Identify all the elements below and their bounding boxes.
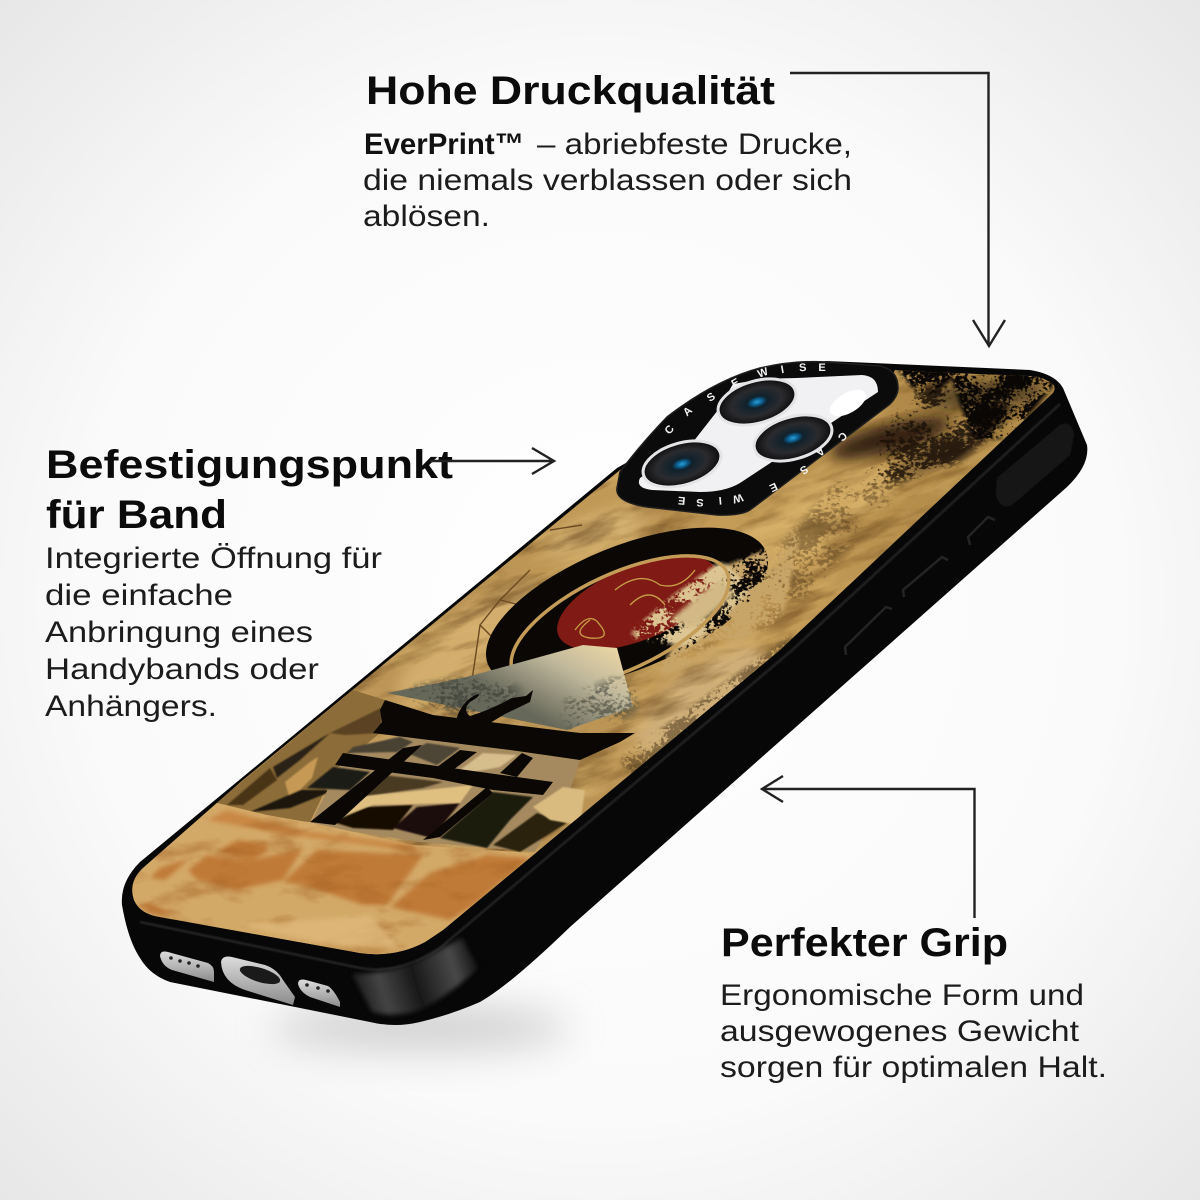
pale floor lighter patch (240, 915, 400, 950)
red sun (557, 558, 718, 648)
gold ring (509, 554, 731, 674)
lens: top (713, 371, 801, 433)
heading (46, 443, 453, 537)
CASEWISE lettering: E (818, 362, 826, 374)
scene background between beams (310, 735, 580, 852)
CASEWISE lettering: S (705, 391, 718, 405)
speckled dirt lower right (620, 634, 796, 773)
stone floor (132, 803, 538, 954)
clouds solid core (670, 580, 735, 628)
speaker holes right (305, 983, 330, 993)
marble texture (202, 370, 1042, 946)
swirl details (227, 707, 383, 812)
mottled crack lines (760, 472, 902, 602)
heading: Hohe Druckqualität (366, 69, 775, 113)
CASEWISE lettering (663, 362, 849, 508)
cream blob right (533, 787, 585, 825)
CASEWISE lettering: S (799, 362, 807, 374)
body text (45, 542, 382, 723)
body text (363, 128, 852, 233)
CASEWISE lettering: A (813, 444, 827, 458)
heading: Befestigungspunkt (46, 443, 453, 487)
mountain shading right (560, 675, 640, 735)
side wall rim (140, 404, 1060, 969)
body text: ausgewogenes Gewicht (720, 1015, 1080, 1048)
callout: Befestigungspunkt (45, 443, 453, 723)
body text: die einfache (45, 579, 233, 612)
lens: right (749, 407, 837, 469)
arrow: strap attachment (430, 448, 554, 474)
CASEWISE lettering: I (718, 494, 722, 506)
usb opening (221, 957, 295, 1005)
lens: left (638, 433, 726, 495)
CASEWISE lettering: E (678, 494, 686, 506)
CASEWISE lettering: S (696, 496, 704, 508)
body text: EverPrint™ (364, 128, 524, 161)
floor mottling (134, 816, 533, 954)
case body (122, 361, 1087, 1025)
flash (826, 384, 870, 422)
camera island (617, 362, 898, 515)
CASEWISE lettering: C (663, 423, 677, 437)
callout: Hohe Druckqualität (363, 69, 852, 233)
clouds over sun (628, 562, 750, 645)
side buttons (845, 517, 995, 655)
left brown swirl area (205, 690, 385, 822)
heading: Perfekter Grip (721, 921, 1008, 965)
right speaker (298, 980, 340, 1007)
heading: für Band (46, 493, 227, 537)
phone case (122, 360, 1088, 1025)
cream wave (344, 785, 473, 817)
artwork base (132, 370, 1055, 954)
sun gold lines (575, 570, 695, 638)
speaker holes left (169, 956, 200, 968)
body text: Ergonomische Form und (720, 979, 1084, 1012)
artwork (132, 360, 1055, 954)
usb hole (238, 962, 282, 988)
body text: – abriebfeste Drucke, (537, 128, 852, 161)
tree branch cracks (472, 525, 582, 680)
body text: sorgen für optimalen Halt. (720, 1051, 1107, 1084)
dissolving ink edge (655, 530, 800, 680)
white lens plate (639, 375, 878, 492)
body text: Anbringung eines (45, 616, 313, 649)
strap attachment slot (996, 424, 1074, 506)
artwork light patches (396, 462, 893, 758)
CASEWISE lettering: W (756, 366, 770, 381)
charging ports (160, 952, 340, 1007)
arrow: grip (762, 776, 974, 918)
body text: Handybands oder (45, 653, 319, 686)
body text: Integrierte Öffnung für (45, 542, 382, 575)
orange bricks (135, 810, 530, 920)
drop shadow under phone (270, 1004, 570, 1052)
body text (720, 979, 1107, 1084)
CASEWISE lettering: W (731, 491, 744, 505)
left speaker (160, 952, 214, 982)
corner gloss (352, 938, 478, 1015)
CASEWISE lettering: A (681, 405, 695, 419)
CASEWISE lettering: S (797, 462, 810, 476)
CASEWISE lettering: I (780, 364, 785, 376)
mountain (387, 645, 633, 730)
mountain shading (395, 680, 530, 718)
cat (456, 690, 533, 723)
callout: Perfekter Grip (720, 921, 1107, 1084)
camera ring (617, 362, 898, 515)
body text: Anhängers. (45, 690, 217, 723)
dark clouds top right (826, 365, 1060, 485)
arrow: print quality (790, 73, 1005, 346)
body text: die niemals verblassen oder sich (363, 164, 852, 197)
dark scene panels (307, 737, 567, 852)
black ink ring (486, 528, 801, 676)
torii gate (310, 700, 635, 840)
body text: ablösen. (363, 200, 490, 233)
CASEWISE lettering: E (730, 376, 742, 390)
CASEWISE lettering: C (835, 429, 849, 443)
CASEWISE lettering: E (767, 480, 779, 494)
